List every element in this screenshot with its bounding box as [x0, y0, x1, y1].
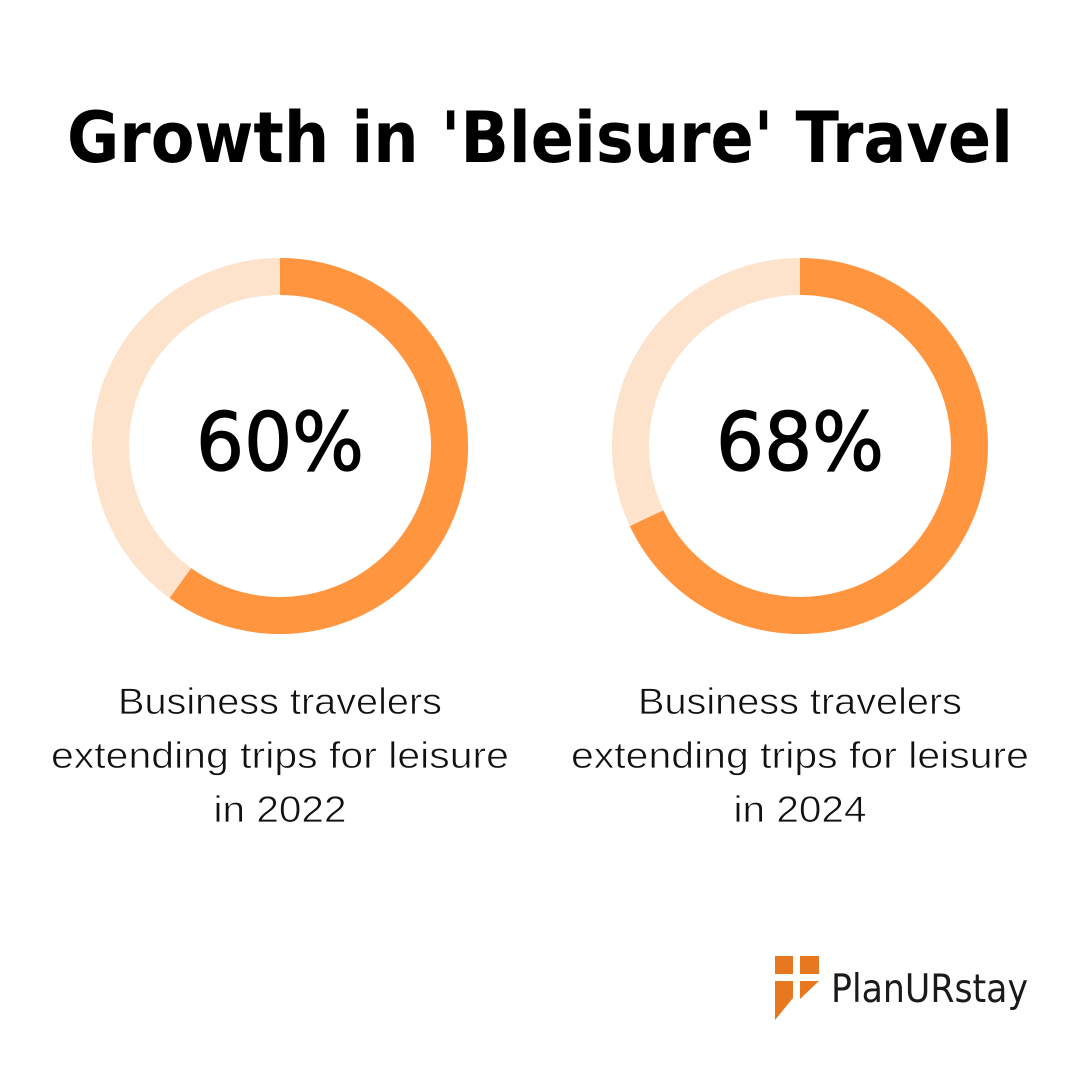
caption: 2022: Business travelers [118, 681, 442, 722]
caption: 2022 [51, 681, 509, 830]
caption: 2024 [571, 681, 1029, 830]
panel: 2024 [571, 276, 1029, 830]
icon: logo mark [775, 956, 819, 1020]
title: Growth in 'Bleisure' Travel [67, 97, 1013, 179]
caption: 2024: in 2024 [734, 789, 866, 830]
panel: 2022 [51, 276, 509, 830]
donut chart: 68% [630, 276, 970, 616]
value: 68%: 68% [716, 396, 884, 489]
value: 60%: 60% [196, 396, 364, 489]
caption: 2022: extending trips for leisure [51, 735, 509, 776]
donut chart: 60% [110, 276, 450, 616]
logo: PlanURstay [775, 956, 1028, 1020]
caption: 2024: Business travelers [638, 681, 962, 722]
caption: 2022: in 2022 [214, 789, 346, 830]
logo wordmark: PlanURstay [831, 967, 1028, 1012]
caption: 2024: extending trips for leisure [571, 735, 1029, 776]
